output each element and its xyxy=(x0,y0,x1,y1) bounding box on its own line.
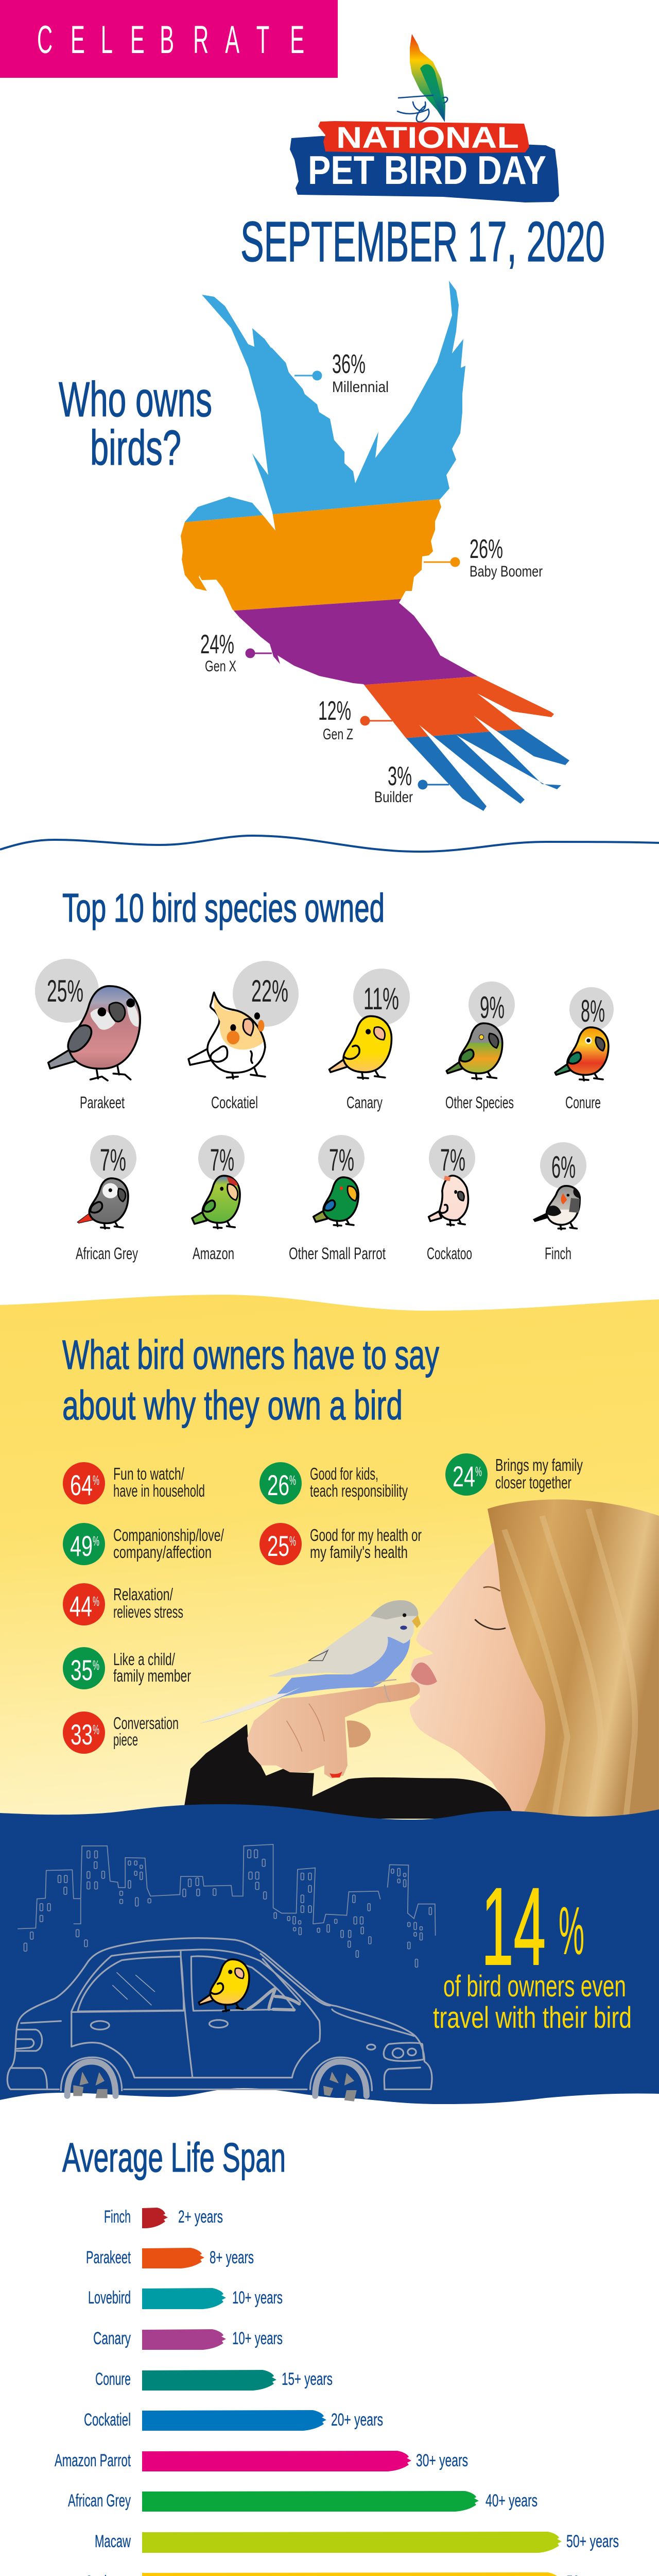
stat: 14%: % xyxy=(559,1893,584,1969)
stat: 33% conversation piece: 33 xyxy=(71,1718,93,1751)
bar: macaw: Macaw xyxy=(95,2532,131,2551)
species: other small parrot 7%: 7% xyxy=(329,1143,354,1177)
panel: travel with bird xyxy=(0,1804,659,2104)
icon: zebra finch xyxy=(533,1186,580,1229)
species names row 1 xyxy=(80,1093,601,1112)
chart: parrot silhouette by generation xyxy=(181,281,569,811)
callout: 12% gen z: Gen Z xyxy=(323,726,353,743)
stat: 49% companionship: company/affection xyxy=(113,1543,212,1562)
bar: parakeet: 8+ years xyxy=(210,2248,254,2267)
callout: 24% gen x: Gen X xyxy=(205,658,236,675)
stat: 49% companionship: % xyxy=(93,1533,99,1549)
species names row 2: Other Small Parrot xyxy=(289,1244,386,1263)
stat: 64% fun to watch xyxy=(63,1462,205,1504)
heading: who owns birds xyxy=(59,372,212,476)
species: other species 9%: 9% xyxy=(480,990,505,1025)
bar: parakeet xyxy=(86,2248,254,2268)
stat: 44% relaxation: % xyxy=(93,1594,99,1609)
species names row 1: Parakeet xyxy=(80,1093,125,1112)
bar: african grey: African Grey xyxy=(68,2491,131,2511)
bar: conure: Conure xyxy=(95,2369,131,2389)
heading: top 10 species: Top 10 bird species owned xyxy=(62,885,385,930)
species: canary 11%: 11% xyxy=(363,981,399,1016)
stat: 24% family closer: % xyxy=(475,1464,482,1479)
stat: 26% good for kids xyxy=(259,1462,408,1504)
callout: 36% millennial: 36% xyxy=(332,349,366,379)
bar: cockatiel: 20+ years xyxy=(331,2410,383,2430)
bar: canary xyxy=(93,2329,283,2350)
logo bird xyxy=(397,34,447,122)
stat: 26% good for kids: % xyxy=(289,1472,296,1488)
callout: 12% gen z: 12% xyxy=(318,696,351,726)
stat: 25% health: my family's health xyxy=(310,1543,408,1562)
bar: finch: 2+ years xyxy=(178,2207,223,2227)
bar: lovebird: 10+ years xyxy=(232,2288,283,2308)
species names row 2: Amazon xyxy=(193,1244,234,1263)
stat: 25% health: % xyxy=(289,1533,296,1549)
icon: parakeet xyxy=(48,986,140,1080)
callout: 36% millennial: Millennial xyxy=(332,379,389,396)
callout: 24% gen x xyxy=(200,630,272,675)
stat: 35% like a child: 35 xyxy=(71,1654,93,1686)
species: conure 8%: 8% xyxy=(581,994,605,1028)
stat: 35% like a child: Like a child/ xyxy=(113,1650,176,1669)
stat: 24% family closer: Brings my family xyxy=(495,1455,583,1475)
callout: 12% gen z xyxy=(318,696,392,743)
bar: cockatoo xyxy=(85,2572,619,2576)
icon: conure xyxy=(555,1027,609,1080)
species: finch 6%: 6% xyxy=(551,1150,576,1184)
species: cockatiel 22%: 22% xyxy=(251,974,288,1008)
species names row 2: African Grey xyxy=(76,1244,138,1263)
stat: 49% companionship xyxy=(63,1523,224,1565)
bar: cockatiel: Cockatiel xyxy=(84,2410,131,2430)
species: african grey 7% xyxy=(77,1135,136,1229)
celebrate text: CELEBRATE xyxy=(37,18,304,61)
callout: 26% baby boomer: Baby Boomer xyxy=(470,563,543,580)
band: gen x xyxy=(234,599,478,685)
bar: macaw: 50+ years xyxy=(566,2532,619,2551)
species names row 1: Cockatiel xyxy=(211,1093,258,1112)
icon: canary in car window xyxy=(199,1959,249,2011)
callout: 3% builder xyxy=(374,761,449,806)
species: african grey 7%: 7% xyxy=(100,1143,126,1177)
callout: 26% baby boomer xyxy=(424,534,543,580)
stat: 35% like a child: % xyxy=(93,1657,99,1673)
bar: canary: 10+ years xyxy=(232,2329,283,2348)
species: parakeet 25%: 25% xyxy=(47,974,83,1008)
icon: eclectus parrot xyxy=(314,1177,358,1226)
icon: moluccan cockatoo xyxy=(429,1176,468,1226)
stat: 35% like a child xyxy=(63,1647,191,1689)
species: conure 8% xyxy=(555,987,614,1080)
species names row 1: Other Species xyxy=(445,1093,514,1112)
species names row 2 xyxy=(76,1244,571,1263)
bar: conure xyxy=(95,2369,333,2391)
stat: 35% like a child: family member xyxy=(113,1666,191,1685)
logo text national: NATIONAL xyxy=(336,121,519,155)
stat: 64% fun to watch: Fun to watch/ xyxy=(113,1464,185,1483)
heading: average life span: Average Life Span xyxy=(62,2134,286,2180)
stat: 64% fun to watch: have in household xyxy=(113,1481,205,1500)
species: amazon 7% xyxy=(192,1135,245,1228)
species: amazon 7%: 7% xyxy=(210,1143,234,1177)
stat: 24% family closer: closer together xyxy=(495,1473,571,1492)
band: baby boomer xyxy=(181,499,441,611)
logo text pet bird day: PET BIRD DAY xyxy=(308,147,546,193)
bar: conure: 15+ years xyxy=(282,2369,333,2389)
heading: who owns birds: Who owns xyxy=(59,372,212,427)
species: other small parrot 7% xyxy=(314,1135,365,1226)
heading: what bird owners have to say xyxy=(62,1332,439,1428)
stat: 25% health: 25 xyxy=(267,1530,289,1562)
bar: lovebird: Lovebird xyxy=(88,2288,131,2308)
species: finch 6% xyxy=(533,1142,586,1229)
bar: amazon parrot: 30+ years xyxy=(416,2451,468,2470)
sleeve and top xyxy=(184,1724,515,1819)
bar: parakeet: Parakeet xyxy=(86,2248,131,2267)
panel: why they own a bird xyxy=(0,1295,659,1826)
stat: 33% conversation piece: piece xyxy=(113,1730,138,1749)
bar: amazon parrot xyxy=(55,2451,468,2471)
species: parakeet 25% xyxy=(35,959,140,1080)
stat: 49% companionship: Companionship/love/ xyxy=(113,1526,224,1545)
callout: 26% baby boomer: 26% xyxy=(470,534,503,564)
stat: 25% health xyxy=(259,1523,422,1565)
stat: 25% health: Good for my health or xyxy=(310,1526,422,1545)
stat: 26% good for kids: 26 xyxy=(267,1469,289,1501)
species: canary 11% xyxy=(330,969,410,1079)
stat: 64% fun to watch: 64 xyxy=(70,1469,93,1501)
band: builder xyxy=(406,729,569,811)
heading: what bird owners have to say: about why they own a bird xyxy=(62,1382,403,1428)
bar: amazon parrot: Amazon Parrot xyxy=(55,2451,131,2470)
stat: 44% relaxation: relieves stress xyxy=(113,1602,183,1621)
stat: 33% conversation piece xyxy=(63,1711,179,1754)
bar: african grey: 40+ years xyxy=(485,2491,537,2511)
photo: woman kissing budgie xyxy=(184,1499,659,1820)
icon: african grey xyxy=(77,1178,128,1229)
callout: 24% gen x: 24% xyxy=(200,630,234,659)
icon: senegal parrot xyxy=(446,1023,502,1079)
stat: 44% relaxation: 44 xyxy=(70,1590,92,1622)
species: cockatiel 22% xyxy=(188,961,299,1079)
stat: 49% companionship: 49 xyxy=(70,1530,93,1562)
callout: 3% builder: Builder xyxy=(374,789,413,806)
bar: canary: Canary xyxy=(93,2329,131,2348)
stat: 33% conversation piece: Conversation xyxy=(113,1714,179,1733)
stat: 26% good for kids: Good for kids, xyxy=(310,1464,378,1483)
celebrate banner xyxy=(0,0,338,78)
band: gen z xyxy=(364,676,554,738)
heading: what bird owners have to say: What bird owners have to say xyxy=(62,1332,439,1378)
logo: National Pet Bird Day xyxy=(290,34,559,202)
car xyxy=(7,1938,432,2101)
bar: macaw xyxy=(95,2532,619,2553)
icon: amazon parrot xyxy=(192,1176,240,1228)
species names row 1: Canary xyxy=(346,1093,383,1112)
budgie xyxy=(200,1600,421,1723)
species: cockatoo 7% xyxy=(429,1135,475,1226)
stat: 33% conversation piece: % xyxy=(93,1722,99,1737)
woman xyxy=(410,1499,659,1820)
species names row 2: Finch xyxy=(545,1244,571,1263)
species names row 2: Cockatoo xyxy=(427,1244,472,1263)
stat: 14% xyxy=(433,1865,632,2035)
band: millennial xyxy=(184,281,465,522)
stat: 26% good for kids: teach responsibility xyxy=(310,1481,408,1500)
stat: 44% relaxation xyxy=(63,1583,183,1625)
callout: 3% builder: 3% xyxy=(388,761,412,791)
bar: african grey xyxy=(68,2491,537,2512)
stat: 44% relaxation: Relaxation/ xyxy=(113,1585,174,1604)
stat: 24% family closer xyxy=(445,1453,583,1496)
stat: 64% fun to watch: % xyxy=(93,1472,99,1488)
species: other species 9% xyxy=(446,981,515,1079)
callout: 36% millennial xyxy=(294,349,389,396)
bar: lovebird xyxy=(88,2288,283,2309)
icon: cockatiel xyxy=(188,992,265,1079)
blue banner xyxy=(290,136,559,202)
stat: 24% family closer: 24 xyxy=(453,1460,475,1493)
bar: cockatiel xyxy=(84,2410,383,2431)
chart: life span bars xyxy=(55,2207,619,2576)
logo: BEAK xyxy=(0,0,188,2576)
species names row 1: Conure xyxy=(565,1093,601,1112)
species: cockatoo 7%: 7% xyxy=(440,1143,465,1177)
heading: who owns birds: birds? xyxy=(90,420,181,476)
red banner xyxy=(318,121,529,154)
bar: finch: Finch xyxy=(104,2207,131,2227)
bar: finch xyxy=(104,2207,223,2228)
skyline xyxy=(18,1844,436,1967)
stat: 14%: 14 xyxy=(481,1865,546,1988)
icon: canary xyxy=(330,1016,391,1079)
hand xyxy=(247,1682,420,1778)
